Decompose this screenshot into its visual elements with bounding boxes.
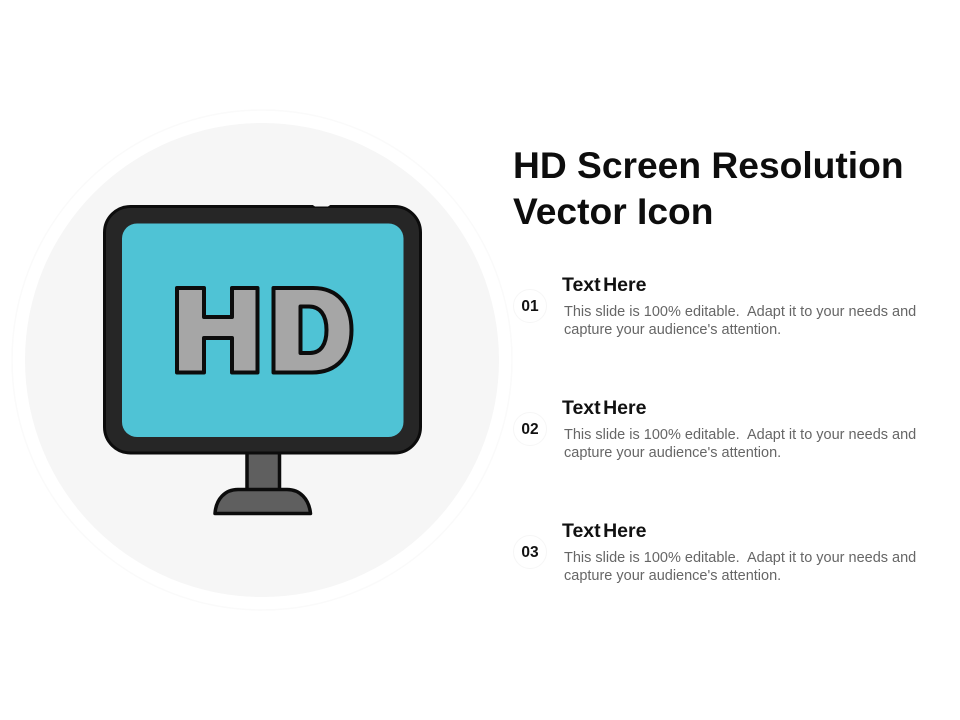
heading 02: Text Here (562, 396, 646, 418)
number 02 (513, 412, 547, 446)
monitor stand neck (247, 452, 280, 490)
description 01 (564, 304, 916, 338)
letter H (177, 288, 258, 372)
description 03: capture your audience's attention. (564, 568, 781, 584)
letter D (274, 288, 352, 372)
number 03: 03 (521, 544, 539, 561)
description 01: This slide is 100% editable. Adapt it to your needs and (564, 304, 916, 320)
description 03: This slide is 100% editable. Adapt it to your needs and (564, 550, 916, 566)
heading 03: Text Here (562, 520, 646, 542)
title (513, 144, 904, 232)
description 02: This slide is 100% editable. Adapt it to your needs and (564, 427, 916, 443)
description 01: capture your audience's attention. (564, 322, 781, 338)
camera notch (312, 204, 331, 206)
item 01 (513, 274, 916, 338)
title: Vector Icon (513, 190, 713, 232)
description 02: capture your audience's attention. (564, 445, 781, 461)
background circle (25, 123, 499, 597)
icon: HD monitor (104, 204, 420, 514)
monitor frame (104, 206, 420, 453)
monitor stand base (215, 490, 310, 514)
number 01 (513, 289, 547, 323)
description 03 (564, 550, 916, 584)
screen (122, 224, 404, 437)
title: HD Screen Resolution (513, 144, 904, 186)
item 02 (513, 396, 916, 461)
number 01: 01 (521, 298, 539, 315)
number 03 (513, 535, 547, 569)
item 03 (513, 520, 916, 584)
heading 01: Text Here (562, 274, 646, 296)
description 02 (564, 427, 916, 461)
number 02: 02 (521, 421, 539, 438)
